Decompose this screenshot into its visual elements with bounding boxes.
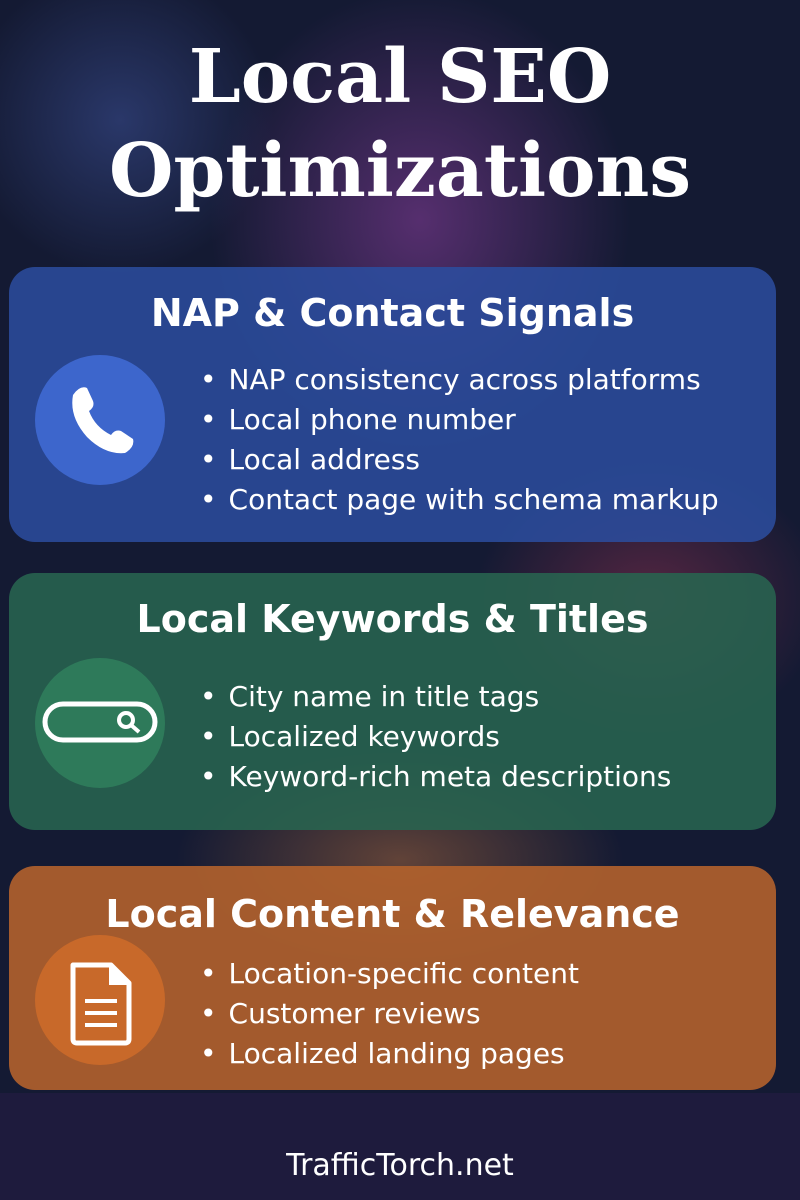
heading: NAP: NAP & Contact Signals xyxy=(151,291,634,335)
title: Optimizations xyxy=(109,128,691,214)
bullets: keywords: City name in title tags xyxy=(229,680,539,713)
icon: search bar xyxy=(35,658,165,788)
heading: content: Local Content & Relevance xyxy=(105,892,680,936)
bullets: NAP: Local phone number xyxy=(229,403,516,436)
title xyxy=(109,34,691,214)
footer xyxy=(0,1093,800,1200)
bullets: content: Location-specific content xyxy=(229,957,579,990)
panel: local keywords xyxy=(9,573,776,830)
bullets: content xyxy=(204,957,579,1070)
footer: TrafficTorch.net xyxy=(286,1148,514,1183)
bullets: NAP: Local address xyxy=(229,443,420,476)
title: Local SEO xyxy=(189,34,611,120)
bullets: keywords xyxy=(204,680,671,793)
bullets: NAP: Contact page with schema markup xyxy=(229,483,719,516)
icon: document xyxy=(35,935,165,1065)
bullets: content: Localized landing pages xyxy=(229,1037,565,1070)
panel: local content xyxy=(9,866,776,1090)
bullets: content: Customer reviews xyxy=(229,997,481,1030)
bullets: keywords: Localized keywords xyxy=(229,720,500,753)
heading: keywords: Local Keywords & Titles xyxy=(137,597,648,641)
bullets: NAP: NAP consistency across platforms xyxy=(229,363,701,396)
bullets: keywords: Keyword-rich meta descriptions xyxy=(229,760,671,793)
panel: NAP & contact signals xyxy=(9,267,776,542)
icon: phone xyxy=(35,355,165,485)
bullets: NAP xyxy=(204,363,719,516)
